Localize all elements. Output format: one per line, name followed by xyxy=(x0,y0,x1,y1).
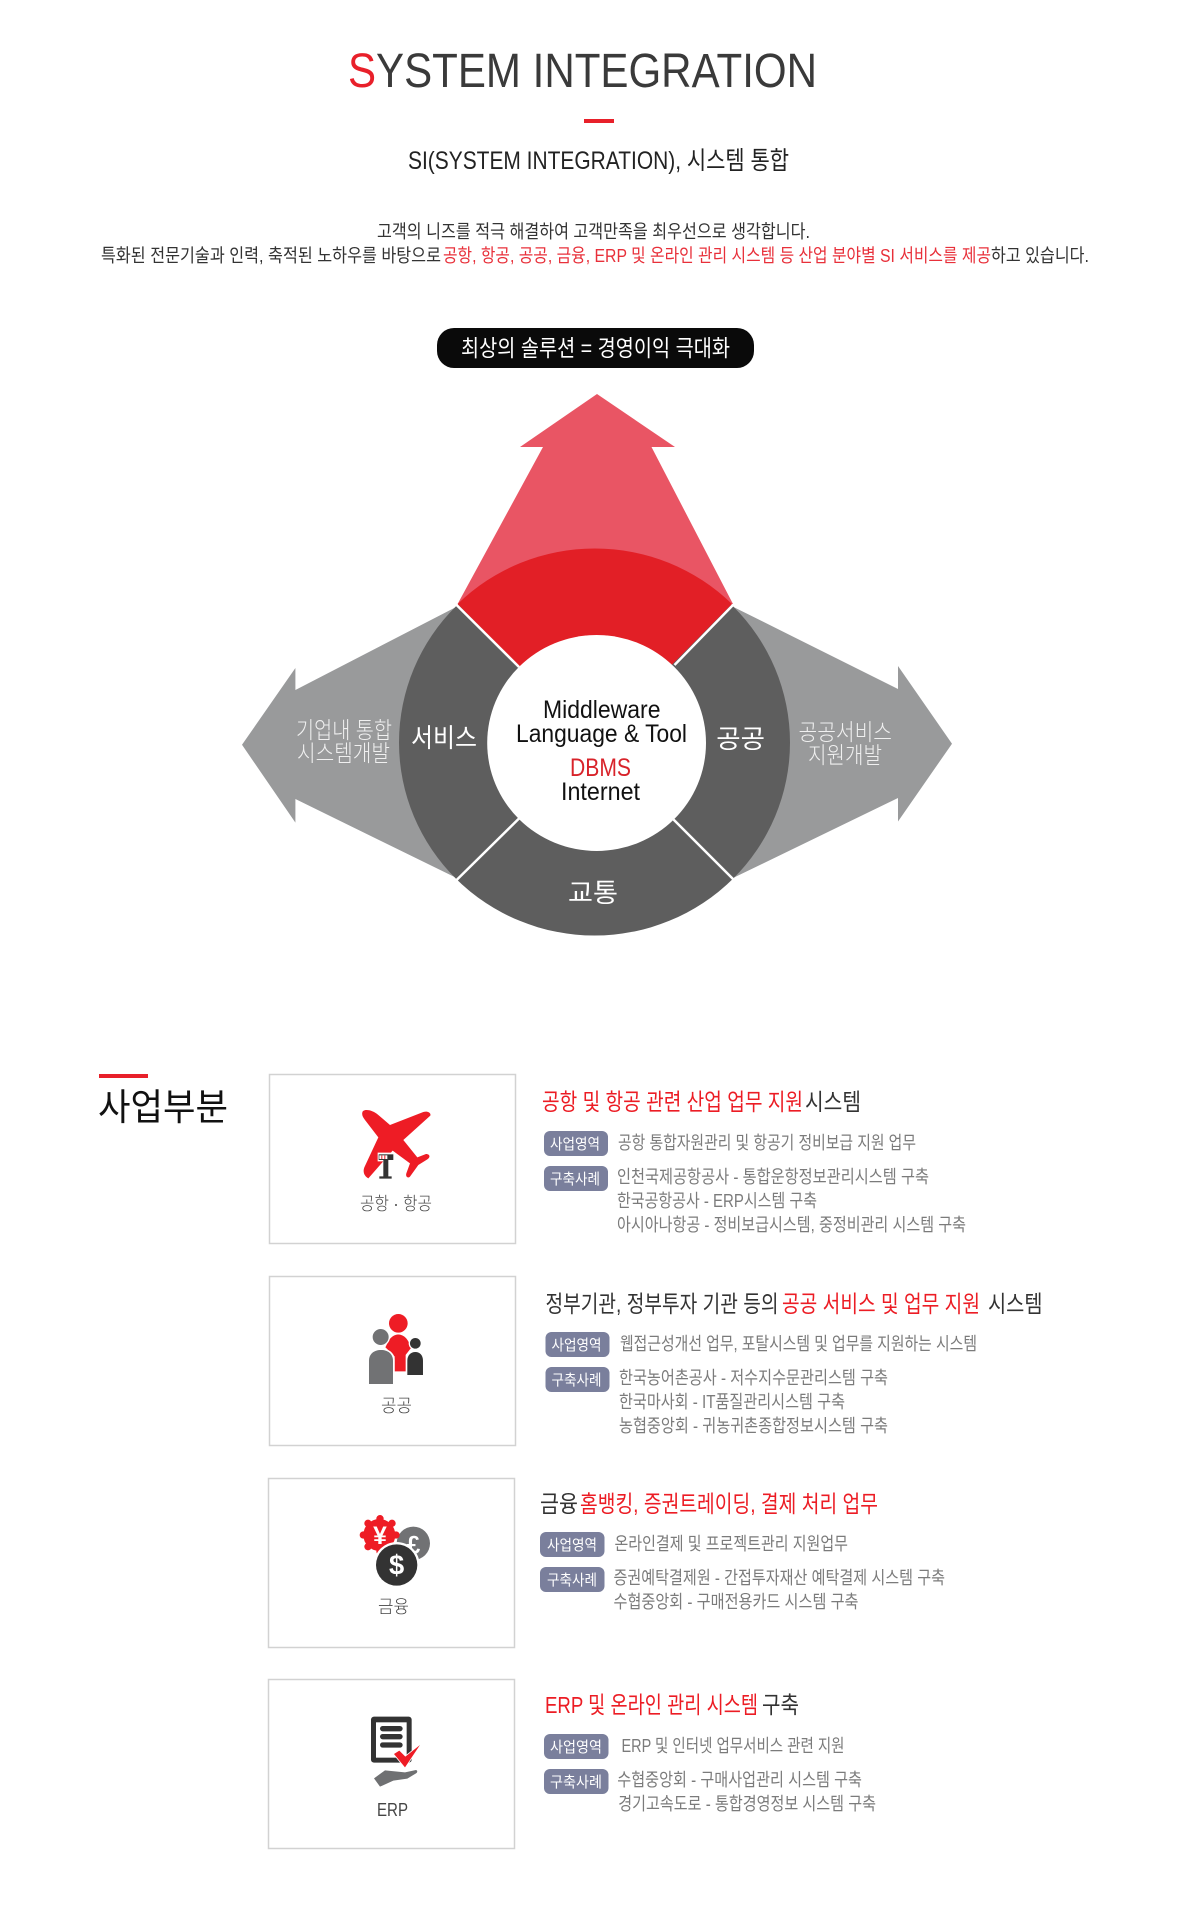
subtitle: SI(SYSTEM INTEGRATION), 시스템 통합 xyxy=(408,147,789,175)
card text: 공항 및 항공 관련 산업 업무 지원 xyxy=(542,1089,803,1115)
card text: 구축사례 xyxy=(552,1372,602,1389)
card text: 시스템 xyxy=(988,1291,1042,1317)
card text: 구축사례 xyxy=(550,1171,600,1188)
icon: currency coins: £ xyxy=(406,1532,420,1559)
card text xyxy=(544,1692,876,1814)
panel: public xyxy=(270,1276,1042,1446)
card text: ERP 및 온라인 관리 시스템 xyxy=(545,1692,758,1718)
ring labels: 공공 xyxy=(716,724,765,754)
card text: 증권예탁결제원 - 간접투자재산 예탁결제 시스템 구축 xyxy=(614,1568,945,1588)
icon: currency coins: ¥ xyxy=(373,1523,387,1550)
card text: 금융 xyxy=(540,1491,578,1517)
card text: 시스템 xyxy=(805,1089,861,1115)
card text: 웹접근성개선 업무, 포탈시스템 및 업무를 지원하는 시스템 xyxy=(620,1334,977,1354)
card text: 인천국제공항공사 - 통합운항정보관리시스템 구축 xyxy=(617,1167,929,1187)
icon: currency coins xyxy=(360,1515,430,1588)
ring labels xyxy=(411,723,765,908)
card text: 사업영역 xyxy=(550,1136,600,1153)
icon: currency coins: $ xyxy=(389,1550,404,1581)
center text: Internet xyxy=(561,778,640,806)
inner circle xyxy=(487,635,706,851)
card text: 구축사례 xyxy=(547,1572,597,1589)
card: 공항 · 항공 xyxy=(360,1194,432,1214)
card: 공공 xyxy=(381,1396,412,1416)
arrow: left grey xyxy=(242,607,457,878)
card text: 한국공항공사 - ERP시스템 구축 xyxy=(617,1191,817,1211)
intro text: 공항, 항공, 공공, 금융, ERP 및 온라인 관리 시스템 등 산업 분야별 SI 서비스를 제공 xyxy=(443,245,991,266)
card text xyxy=(542,1089,966,1235)
card text: 정부기관, 정부투자 기관 등의 xyxy=(546,1291,778,1317)
intro text: 하고 있습니다. xyxy=(991,245,1089,266)
card xyxy=(270,1074,516,1244)
card text: 한국농어촌공사 - 저수지수문관리스템 구축 xyxy=(619,1368,888,1388)
panel: finance xyxy=(268,1478,945,1648)
card: 금융 xyxy=(378,1597,409,1617)
card text: 농협중앙회 - 귀농귀촌종합정보시스템 구축 xyxy=(619,1416,888,1436)
right arrow label: 공공서비스 xyxy=(798,719,892,745)
section heading: 사업부분 xyxy=(98,1087,228,1128)
left arrow label xyxy=(296,717,392,766)
card text: 공항 통합자원관리 및 항공기 정비보급 지원 업무 xyxy=(618,1133,916,1153)
center text: Language & Tool xyxy=(516,720,687,748)
center text: DBMS xyxy=(570,754,631,782)
card text: 사업영역 xyxy=(550,1739,602,1756)
card text: 온라인결제 및 프로젝트관리 지원업무 xyxy=(614,1534,848,1554)
card text: 구축 xyxy=(762,1692,799,1718)
diagram xyxy=(242,394,952,936)
solution pill: 최상의 솔루션 = 경영이익 극대화 xyxy=(461,335,730,361)
card text: 사업영역 xyxy=(547,1537,597,1554)
solution pill xyxy=(437,328,754,368)
card text: 수협중앙회 - 구매전용카드 시스템 구축 xyxy=(614,1592,858,1612)
ring xyxy=(399,550,790,936)
card text: 경기고속도로 - 통합경영정보 시스템 구축 xyxy=(618,1794,876,1814)
icon: airplane and tower xyxy=(362,1110,430,1179)
center text xyxy=(516,696,687,806)
left arrow label: 기업내 통합 xyxy=(296,717,392,743)
card text: 아시아나항공 - 정비보급시스템, 중정비관리 시스템 구축 xyxy=(617,1215,966,1235)
right arrow label: 지원개발 xyxy=(808,742,882,768)
icon: document check hand xyxy=(371,1717,420,1787)
card text: 공공 서비스 및 업무 지원 xyxy=(782,1291,980,1317)
card text xyxy=(546,1291,1042,1436)
intro text xyxy=(101,221,1089,266)
title: SYSTEM INTEGRATION xyxy=(348,45,817,98)
red sector xyxy=(458,548,732,742)
card text xyxy=(540,1491,945,1612)
card text: 사업영역 xyxy=(552,1337,602,1354)
intro text: 고객의 니즈를 적극 해결하여 고객만족을 최우선으로 생각합니다. xyxy=(377,221,810,242)
arrow: right grey xyxy=(733,607,952,878)
intro text: 특화된 전문기술과 인력, 축적된 노하우를 바탕으로 xyxy=(101,245,441,266)
card xyxy=(268,1680,514,1848)
card xyxy=(270,1276,516,1446)
card text: ERP 및 인터넷 업무서비스 관련 지원 xyxy=(622,1736,844,1756)
panel: airport xyxy=(270,1074,966,1244)
panel: ERP xyxy=(268,1680,876,1848)
card text: 홈뱅킹, 증권트레이딩, 결제 처리 업무 xyxy=(580,1491,878,1517)
ring labels: 서비스 xyxy=(411,723,477,753)
left arrow label: 시스템개발 xyxy=(297,740,390,766)
card text: 수협중앙회 - 구매사업관리 시스템 구축 xyxy=(617,1770,862,1790)
card text: 한국마사회 - IT품질관리시스템 구축 xyxy=(619,1392,845,1412)
right arrow label xyxy=(798,719,892,768)
card text: 구축사례 xyxy=(550,1774,602,1791)
icon: people xyxy=(367,1314,424,1384)
arrow: up red xyxy=(458,394,733,604)
card xyxy=(268,1478,514,1648)
title underline xyxy=(584,119,614,123)
ring labels: 교통 xyxy=(568,878,618,908)
center text: Middleware xyxy=(543,696,660,724)
card: ERP xyxy=(377,1800,408,1820)
